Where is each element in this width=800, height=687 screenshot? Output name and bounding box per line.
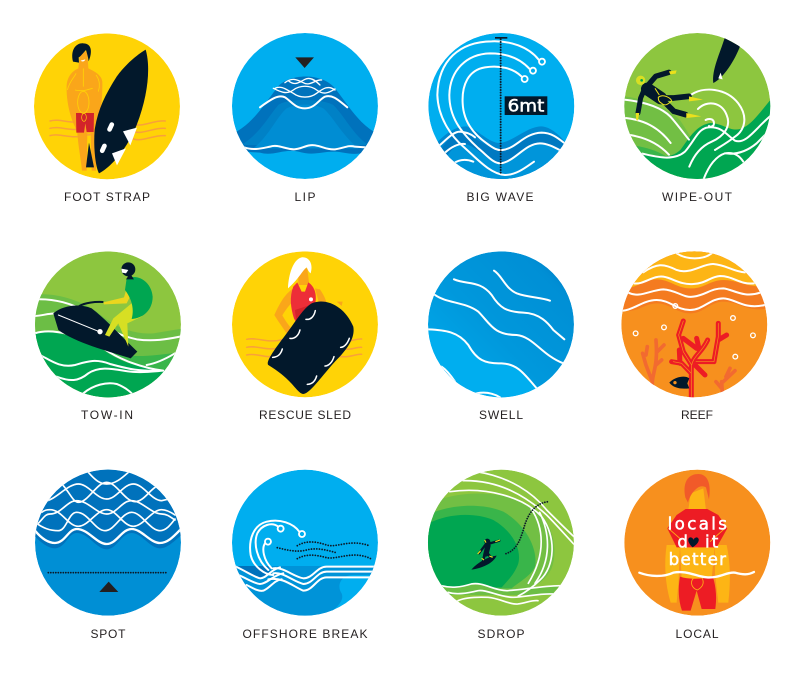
- slogan text: d: [677, 532, 688, 551]
- slogan text: [668, 516, 726, 566]
- icon: local lifeguard with slogan: [624, 470, 770, 616]
- label: rescue sled: RESCUE SLED: [259, 408, 351, 422]
- label: wipe-out: WIPE-OUT: [662, 190, 733, 204]
- badge: swell: [427, 251, 574, 422]
- badge: offshore break: [232, 470, 378, 641]
- badge: spot: [30, 467, 187, 641]
- icon: spot marker under waves: [30, 467, 187, 616]
- label: lip: LIP: [294, 190, 316, 204]
- label: sdrop: SDROP: [478, 627, 524, 641]
- slogan text: it: [705, 532, 719, 551]
- badge: big wave: [428, 33, 574, 204]
- icon: reef with coral and fish: [617, 247, 773, 397]
- icon: swell lines: [427, 251, 574, 403]
- icon: jet ski rider: [33, 251, 183, 400]
- icon: lip of wave: [232, 33, 378, 179]
- icon: surfer with board: [34, 33, 180, 179]
- label: local: LOCAL: [676, 627, 719, 641]
- label: swell: SWELL: [479, 408, 523, 422]
- slogan text: better: [669, 550, 726, 569]
- icon: big wave with height: 6mt: [508, 96, 545, 115]
- label: offshore break: OFFSHORE BREAK: [242, 627, 368, 641]
- slogan text: locals: [668, 514, 727, 533]
- label: tow-in: TOW-IN: [81, 408, 133, 422]
- label: foot strap: FOOT STRAP: [64, 190, 150, 204]
- icon: wipe-out surfer: [623, 33, 772, 183]
- badge: sdrop: [423, 470, 575, 641]
- badge: wipe-out: [623, 33, 772, 204]
- icon: surfer dropping in barrel: [423, 470, 575, 616]
- label: big wave: BIG WAVE: [466, 190, 534, 204]
- badge: tow-in: [33, 251, 183, 422]
- icon: offshore wave with wind: [232, 470, 378, 617]
- label: reef: REEF: [681, 408, 713, 422]
- icon: lifeguard with rescue sled: [232, 251, 378, 397]
- badge: rescue sled: [232, 251, 378, 422]
- badge: lip: [232, 33, 378, 204]
- badge: reef: [621, 251, 768, 419]
- label: spot: SPOT: [90, 627, 126, 641]
- icon: big wave with height: [428, 33, 574, 183]
- badge: foot strap: [34, 33, 180, 204]
- badge: local: [624, 470, 770, 641]
